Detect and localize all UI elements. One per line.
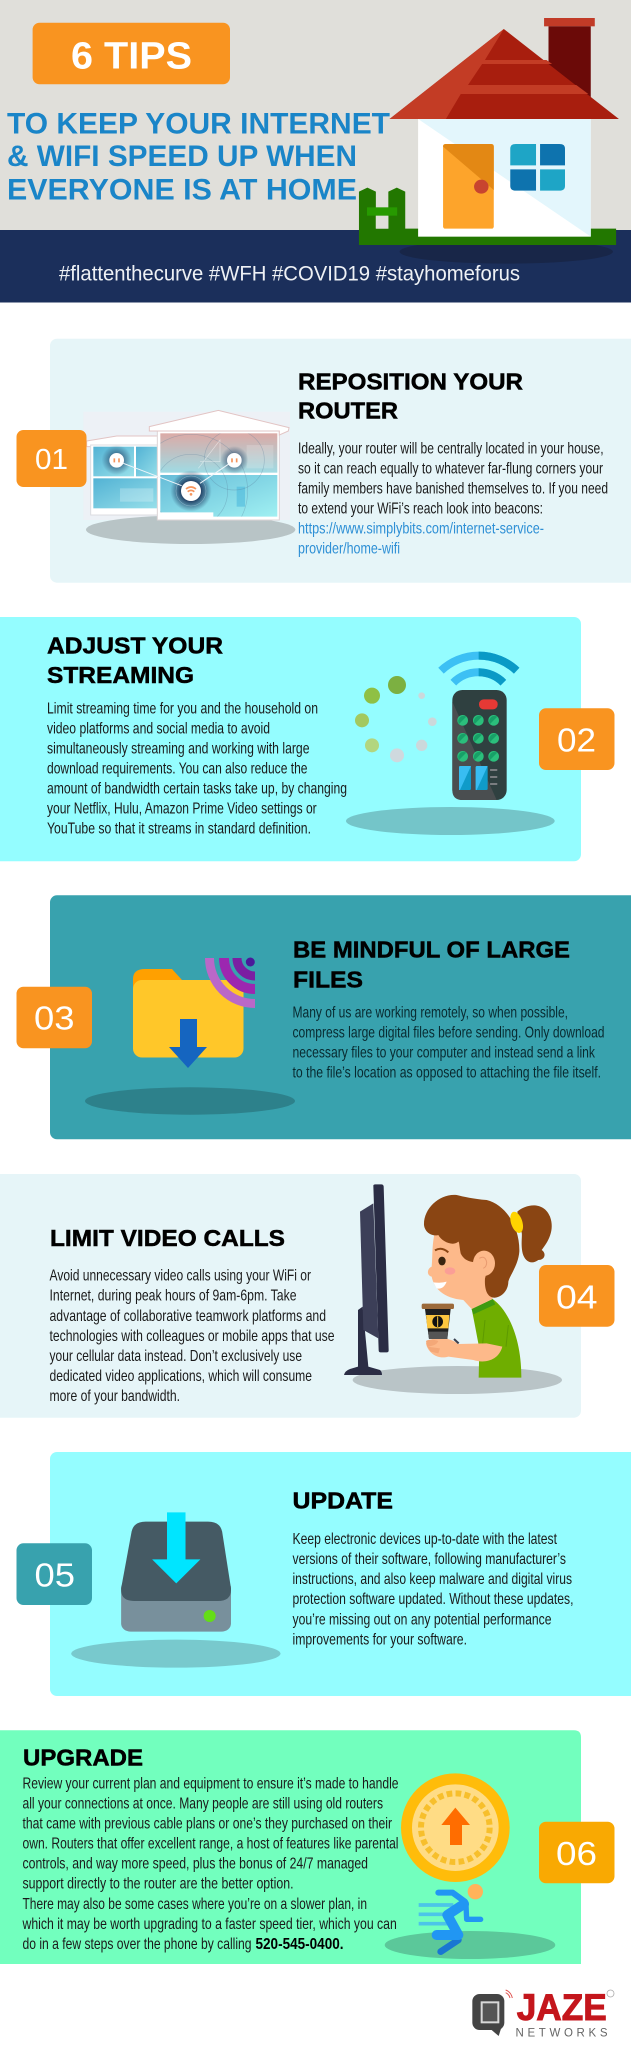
body text: Keep electronic devices up-to-date with the latest	[292, 1531, 557, 1548]
panel: limit video calls	[0, 1174, 614, 1418]
heading: BE MINDFUL OF LARGE	[293, 936, 570, 962]
body text: There may also be some cases where you’re on a slower plan, in	[22, 1896, 367, 1913]
body text: YouTube so that it streams in standard definition.	[47, 821, 311, 838]
body text: all your connections at once. Many people are still using old routers	[22, 1795, 383, 1812]
body text: more of your bandwidth.	[50, 1388, 180, 1405]
icon: logo bubble	[472, 1990, 512, 2036]
body text	[50, 1268, 335, 1405]
illustration: router house	[83, 410, 295, 548]
heading	[47, 632, 223, 688]
title	[7, 107, 390, 206]
body text	[292, 1005, 604, 1082]
logo: Jaze Networks: JAZE	[517, 1987, 607, 2028]
number badge 04: 04	[556, 1278, 598, 1315]
body text: Avoid unnecessary video calls using your WiFi or	[50, 1268, 311, 1285]
body text: which it may be worth upgrading to a faster speed tier, which you can	[22, 1916, 397, 1933]
heading: ADJUST YOUR	[47, 632, 223, 658]
number badge 03: 03	[34, 999, 74, 1036]
body text: your cellular data instead. Don’t exclusively use	[50, 1348, 302, 1365]
panel: upgrade	[0, 1730, 614, 1964]
panel: update	[16, 1452, 631, 1696]
body text: that came with previous cable plans or one’s they purchased on their	[22, 1816, 393, 1833]
heading: LIMIT VIDEO CALLS	[50, 1225, 285, 1251]
panel: be mindful of large files	[16, 895, 631, 1139]
body text: Internet, during peak hours of 9am-6pm. Take	[50, 1288, 297, 1305]
body text: https://www.simplybits.com/internet-service-	[298, 521, 544, 538]
body text: you’re missing out on any potential performance	[292, 1611, 552, 1628]
icon: folder with download arrow	[85, 958, 295, 1115]
title: & WIFI SPEED UP WHEN	[7, 140, 357, 173]
body text: to extend your WiFi’s reach look into beacons:	[298, 501, 543, 518]
body text: Limit streaming time for you and the household on	[47, 700, 318, 717]
number badge 05: 05	[34, 1557, 75, 1594]
body text: improvements for your software.	[292, 1631, 467, 1648]
body text: controls, and way more speed, plus the bonus of 24/7 managed	[22, 1856, 368, 1873]
body text: do in a few steps over the phone by calling	[22, 1936, 251, 1953]
body text: own. Routers that offer excellent range, a host of features like parental	[22, 1836, 398, 1853]
logo: Jaze Networks: NETWORKS	[516, 2028, 608, 2040]
body text	[292, 1531, 574, 1648]
number badge 04	[539, 1265, 614, 1327]
badge: 6 tips: 6 TIPS	[71, 35, 192, 77]
icon: house	[359, 18, 619, 264]
body text: advantage of collaborative teamwork platforms and	[50, 1308, 326, 1325]
body text	[22, 1775, 399, 1953]
number badge 01	[16, 430, 86, 487]
number badge 06: 06	[556, 1835, 597, 1872]
body text: provider/home-wifi	[298, 541, 400, 558]
panel: adjust your streaming	[0, 617, 614, 861]
body text	[298, 440, 608, 558]
body text: video platforms and social media to avoid	[47, 720, 270, 737]
body text: dedicated video applications, which will consume	[50, 1368, 312, 1385]
heading: STREAMING	[47, 662, 194, 688]
heading: FILES	[293, 966, 363, 992]
panel: reposition your router	[16, 339, 631, 583]
header panel	[0, 0, 631, 302]
icon: hard drive with download arrow	[71, 1512, 280, 1668]
body text	[47, 700, 347, 838]
body text: technologies with colleagues or mobile apps that use	[50, 1328, 335, 1345]
heading: UPGRADE	[23, 1745, 143, 1771]
body text: your Netflix, Hulu, Amazon Prime Video settings or	[47, 801, 317, 818]
number badge 05	[16, 1543, 92, 1605]
body text: Review your current plan and equipment to ensure it’s made to handle	[22, 1775, 399, 1792]
title: EVERYONE IS AT HOME	[7, 173, 357, 206]
icon: remote with wifi and loading dots	[346, 656, 555, 835]
heading	[293, 936, 570, 992]
illustration: runner carrying upgrade coin	[385, 1773, 555, 1959]
body text: simultaneously streaming and working with large	[47, 740, 310, 757]
heading: UPDATE	[292, 1488, 393, 1514]
title: TO KEEP YOUR INTERNET	[7, 107, 390, 140]
hashtags: #flattenthecurve #WFH #COVID19 #stayhomeforus	[59, 263, 520, 286]
illustration: girl with coffee at monitor	[344, 1184, 562, 1394]
number badge 02: 02	[557, 722, 596, 759]
number badge 06	[539, 1822, 614, 1883]
badge: 6 tips	[33, 23, 230, 84]
number badge 03	[16, 987, 92, 1048]
logo: Jaze Networks	[472, 1987, 614, 2040]
heading: REPOSITION YOUR	[298, 368, 523, 394]
body text: amount of bandwidth certain tasks take up, by changing	[47, 781, 347, 798]
body text: support directly to the router are the better option.	[22, 1876, 294, 1893]
number badge 01: 01	[35, 444, 68, 476]
heading	[298, 368, 523, 423]
body text: download requirements. You can also reduce the	[47, 760, 308, 777]
number badge 02	[539, 708, 614, 770]
body text: 520-545-0400.	[256, 1936, 344, 1953]
heading: ROUTER	[298, 397, 398, 423]
